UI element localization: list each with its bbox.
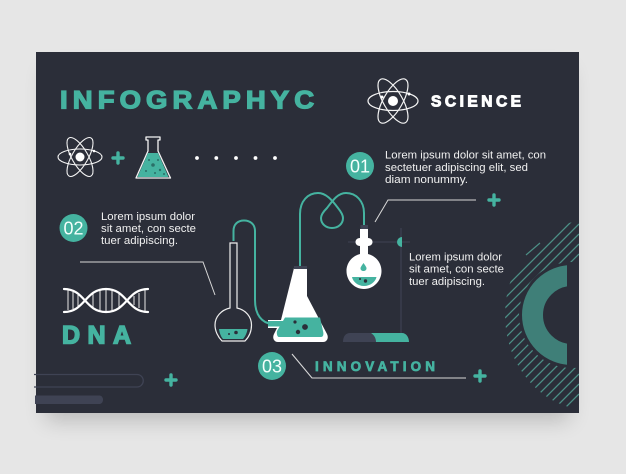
icon: small atom bbox=[58, 134, 102, 180]
text block 02: Lorem ipsum dolor bbox=[101, 211, 195, 223]
conical flask with side arm bbox=[268, 266, 328, 342]
badge 02: 02 bbox=[63, 218, 84, 238]
filled bar bbox=[35, 396, 103, 404]
right tube with loop bbox=[300, 193, 364, 266]
badge 02 bbox=[60, 214, 88, 242]
dotted row bbox=[195, 156, 277, 160]
heading: science: SCIENCE bbox=[431, 94, 521, 110]
badge 03 bbox=[258, 352, 286, 380]
icon: large atom bbox=[368, 75, 418, 127]
leader line 01 bbox=[375, 200, 476, 222]
heading: DNA: DNA bbox=[62, 322, 131, 350]
badge 03: 03 bbox=[262, 356, 282, 376]
decoration: striped half circle bbox=[505, 222, 579, 406]
title: INFOGRAPHYC bbox=[60, 86, 314, 114]
badge 01 bbox=[346, 152, 374, 180]
text block: stand: sit amet, con secte bbox=[409, 264, 504, 276]
icon: plus near bars bbox=[166, 375, 176, 385]
hanging flask bbox=[346, 225, 382, 289]
panel: dark card background bbox=[36, 52, 579, 413]
leader line 03 bbox=[292, 354, 466, 378]
text block: stand: Lorem ipsum dolor bbox=[409, 252, 502, 264]
text block 01: Lorem ipsum dolor sit amet, con bbox=[385, 150, 546, 162]
icon: plus after atom bbox=[113, 153, 123, 163]
text block 01: diam nonummy. bbox=[385, 174, 468, 186]
outlined bar bbox=[34, 374, 143, 387]
icon: DNA helix bbox=[64, 288, 148, 313]
text block 02: sit amet, con secte bbox=[101, 223, 196, 235]
heading: innovation: INNOVATION bbox=[315, 359, 435, 374]
left tube bbox=[234, 220, 272, 324]
lab apparatus bbox=[215, 193, 410, 342]
badge 01: 01 bbox=[350, 156, 370, 176]
icon: plus near 01 bbox=[489, 195, 499, 205]
text block 01 bbox=[385, 150, 546, 186]
retort stand bbox=[343, 228, 410, 342]
text block: stand: tuer adipiscing. bbox=[409, 276, 485, 288]
icon: plus near innovation bbox=[475, 371, 485, 381]
icon: conical flask bbox=[136, 137, 170, 178]
text block: stand bbox=[409, 252, 504, 288]
text block 01: sectetuer adipiscing elit, sed bbox=[385, 162, 528, 174]
card shadow bbox=[46, 70, 569, 420]
leader line 02 bbox=[80, 262, 215, 295]
text block 02 bbox=[101, 211, 196, 247]
round bottom flask bbox=[215, 243, 252, 341]
text block 02: tuer adipiscing. bbox=[101, 235, 178, 247]
